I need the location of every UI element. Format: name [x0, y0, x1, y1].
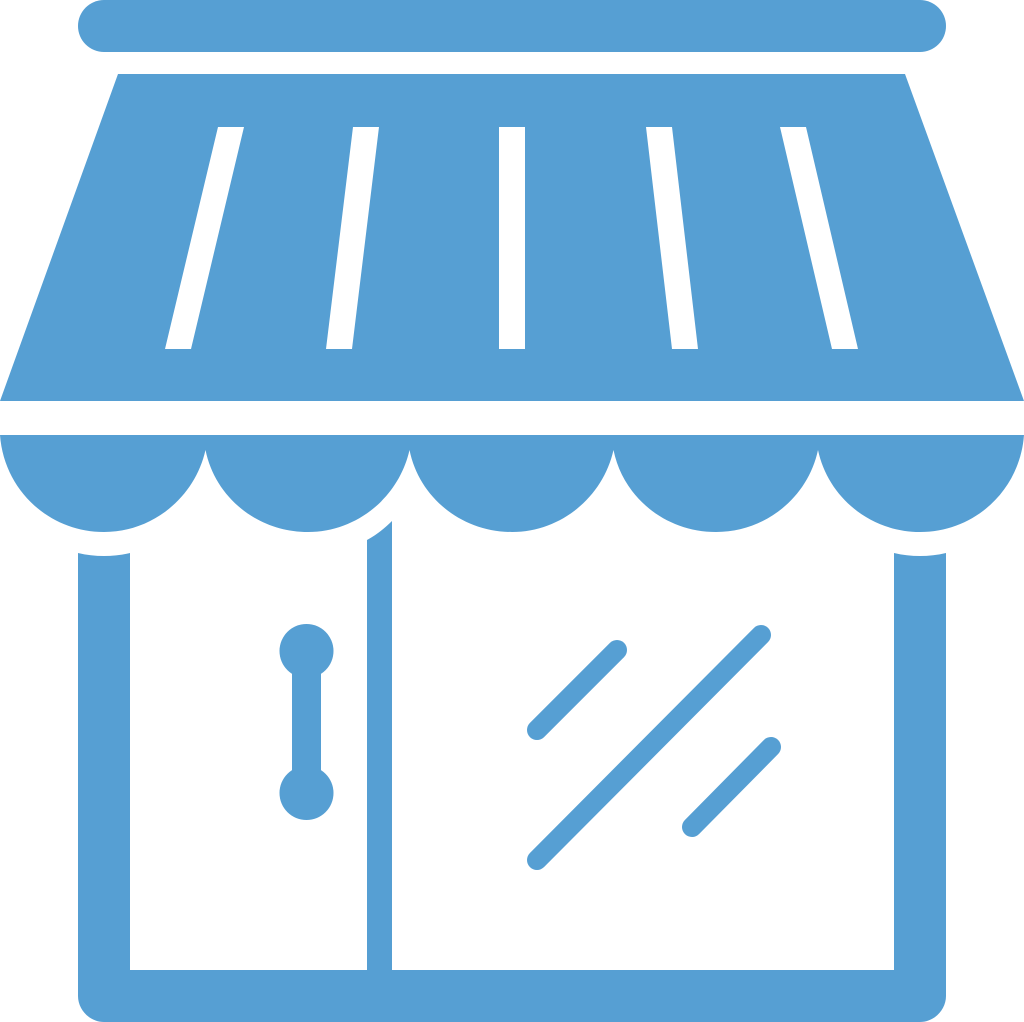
window glare lines — [537, 635, 771, 860]
shop walls and floor — [78, 521, 946, 1022]
door handle — [280, 624, 334, 820]
awning roof with stripes — [0, 74, 1024, 401]
awning top rail — [78, 0, 946, 52]
scalloped valance — [0, 435, 1024, 532]
